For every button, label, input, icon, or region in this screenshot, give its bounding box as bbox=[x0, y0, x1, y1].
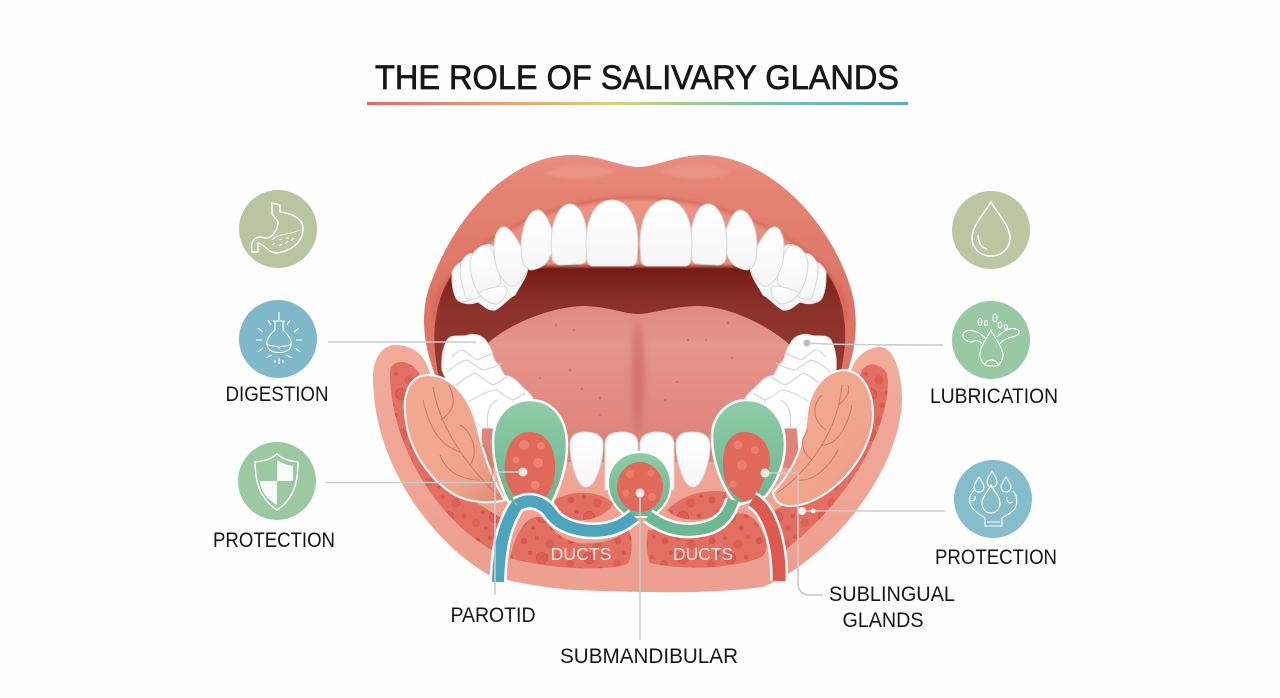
icon: stomach bbox=[239, 190, 317, 268]
digestion label: DIGESTION bbox=[226, 383, 328, 406]
upper lip highlights bbox=[545, 165, 730, 179]
left duct label: DUCTS bbox=[550, 544, 612, 564]
left muscle band bbox=[390, 362, 505, 552]
upper teeth left bbox=[452, 200, 638, 310]
icon: protection drops bbox=[954, 460, 1032, 538]
right green duct bbox=[648, 500, 733, 530]
lubrication label: LUBRICATION bbox=[930, 385, 1058, 408]
protection label right: PROTECTION bbox=[935, 546, 1057, 569]
left blue duct bbox=[498, 501, 634, 582]
mouth illustration bbox=[373, 155, 902, 592]
parotid label: PAROTID bbox=[450, 604, 536, 627]
left parotid leaf gland bbox=[405, 375, 505, 502]
lower back teeth left bbox=[442, 334, 533, 429]
lower back teeth right bbox=[745, 334, 836, 429]
icon: water drop bbox=[952, 191, 1030, 269]
right sublingual gland bbox=[712, 400, 785, 505]
lower front teeth bbox=[570, 432, 710, 490]
right duct label: DUCTS bbox=[673, 544, 733, 564]
tongue bbox=[480, 306, 800, 470]
small left pad bbox=[554, 493, 613, 520]
center submandibular gland bbox=[608, 452, 671, 517]
lips bbox=[424, 155, 856, 382]
protection label left: PROTECTION bbox=[213, 529, 335, 552]
icon: shield bbox=[238, 442, 316, 520]
icon: lubrication bbox=[952, 301, 1030, 379]
upper teeth right bbox=[640, 200, 826, 310]
right red duct bbox=[752, 500, 779, 581]
lip inner shadow bbox=[434, 198, 846, 320]
left bottom pad bbox=[510, 517, 632, 568]
mouth cavity bbox=[434, 198, 845, 382]
right leaf gland bbox=[773, 370, 873, 506]
title underline bbox=[367, 102, 908, 105]
title: THE ROLE OF SALIVARY GLANDS bbox=[375, 59, 899, 97]
submandibular label: SUBMANDIBULAR bbox=[560, 645, 738, 668]
sublingual label: SUBLINGUAL bbox=[829, 583, 955, 606]
glands label: GLANDS bbox=[842, 609, 924, 632]
icon: flask bbox=[239, 300, 317, 378]
right bottom pad bbox=[647, 513, 767, 568]
left sublingual gland bbox=[493, 400, 567, 505]
gum tissue pads bbox=[390, 362, 888, 568]
small right pad bbox=[667, 491, 726, 520]
leader lines bbox=[325, 342, 945, 640]
right muscle band bbox=[775, 364, 888, 550]
leader dots bbox=[476, 337, 816, 515]
lower jaw bbox=[373, 345, 902, 592]
